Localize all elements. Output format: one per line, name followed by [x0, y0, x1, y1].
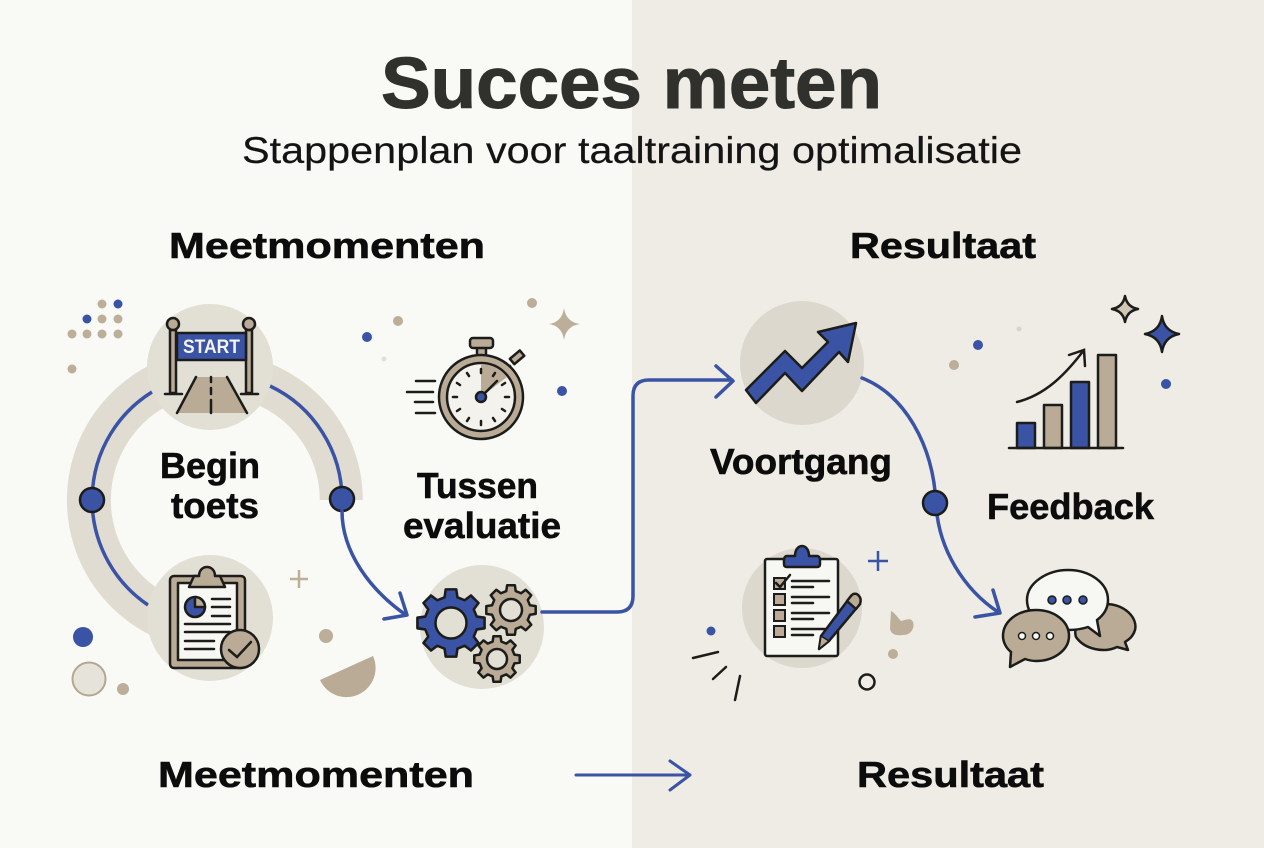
decoration: stars and dots: [949, 296, 1179, 389]
connector: start to gears: [342, 511, 407, 619]
connector: progress to feedback: [862, 378, 1000, 617]
title: Succes meten: [381, 44, 882, 124]
decoration: shapes bottom left: [72, 570, 376, 697]
heading: Resultaat: Resultaat: [850, 225, 1036, 266]
cycle: beige arcs and blue lines: [89, 377, 342, 623]
panel: right background: [632, 0, 1264, 848]
decoration: dots around stopwatch: [362, 298, 580, 396]
icon: stopwatch: [407, 338, 524, 439]
circle: progress backdrop: [740, 301, 864, 425]
footer label: Resultaat: Resultaat: [857, 754, 1044, 795]
icon: checklist with pencil: [765, 546, 861, 656]
icon: rising zigzag arrow: [746, 323, 856, 403]
footer label: Meetmomenten: Meetmomenten: [158, 754, 474, 795]
heading: Meetmomenten: Meetmomenten: [169, 225, 485, 266]
label: Begin toets: toets: [171, 485, 259, 526]
node: right: [330, 487, 354, 511]
circle: report backdrop: [147, 555, 273, 681]
node: right panel: [923, 491, 947, 515]
circle: checklist backdrop: [742, 548, 862, 668]
label: Begin toets: Begin: [160, 445, 260, 486]
circle: start backdrop: [147, 304, 273, 430]
connector: gears to progress: [542, 366, 733, 612]
decoration: marks around checklist: [693, 551, 914, 700]
label: Voortgang: Voortgang: [710, 441, 892, 482]
panel: left background: [0, 0, 632, 848]
icon: clipboard report: [170, 567, 259, 668]
label: Tussen evaluatie: [403, 465, 561, 546]
icon: speech bubbles: [1003, 570, 1135, 667]
icon: gears: [417, 585, 536, 682]
label: Tussen evaluatie: evaluatie: [403, 505, 561, 546]
circle: gears backdrop: [420, 565, 544, 689]
icon: start banner and road: [165, 318, 258, 413]
icon: start banner and road: START: [183, 337, 240, 358]
label: Feedback: Feedback: [987, 486, 1155, 527]
icon: bar chart with arrow: [1009, 350, 1123, 448]
subtitle: Stappenplan voor taaltraining optimalisatie: [242, 130, 1022, 171]
label: Begin toets: [160, 445, 260, 526]
decoration: dots top left: [68, 300, 122, 374]
label: Tussen evaluatie: Tussen: [417, 465, 538, 506]
node: left: [80, 488, 104, 512]
footer arrow: [576, 761, 690, 790]
